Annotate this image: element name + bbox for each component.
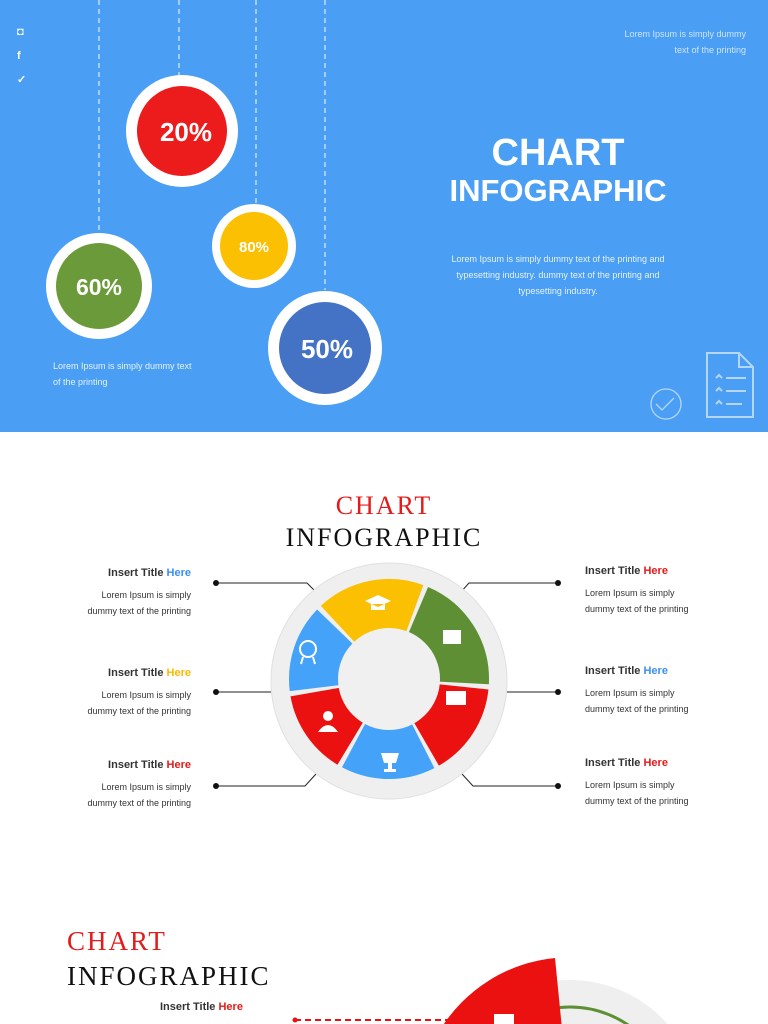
icons: social bbox=[17, 26, 26, 86]
icons: social: f bbox=[17, 50, 21, 62]
label: left 3: Lorem Ipsum is simply bbox=[101, 782, 191, 792]
label: right 3 bbox=[585, 757, 689, 806]
label: left 2: dummy text of the printing bbox=[87, 706, 191, 716]
label: left 1: dummy text of the printing bbox=[87, 606, 191, 616]
label: left 3: dummy text of the printing bbox=[87, 798, 191, 808]
label: left 3 bbox=[87, 759, 191, 808]
heading: chart infographic: INFOGRAPHIC bbox=[450, 173, 666, 208]
label: right 2: dummy text of the printing bbox=[585, 704, 689, 714]
text: bottom left note bbox=[53, 361, 192, 387]
donut chart bbox=[213, 562, 561, 800]
text: top right note bbox=[624, 29, 746, 55]
text: top right note: text of the printing bbox=[674, 45, 746, 55]
label: right 3: Insert Title Here bbox=[585, 757, 668, 769]
text: bottom left note: Lorem Ipsum is simply dummy text bbox=[53, 361, 192, 371]
label: left 1 bbox=[87, 567, 191, 616]
icons: social: ✓ bbox=[17, 74, 26, 86]
label: right 1: dummy text of the printing bbox=[585, 604, 689, 614]
label: right 2: Lorem Ipsum is simply bbox=[585, 688, 675, 698]
heading: section 3: CHART bbox=[67, 926, 167, 956]
icons: social: ◘ bbox=[17, 26, 24, 38]
heading: section 2: CHART bbox=[336, 491, 432, 520]
icon: document checklist bbox=[707, 353, 753, 417]
label: right 3: dummy text of the printing bbox=[585, 796, 689, 806]
hanging circles chart bbox=[46, 0, 754, 420]
heading: section 3 bbox=[67, 926, 271, 991]
label: right 1: Insert Title Here bbox=[585, 565, 668, 577]
label: right 1: Lorem Ipsum is simply bbox=[585, 588, 675, 598]
heading: chart infographic: CHART bbox=[492, 132, 624, 174]
heading: section 3: INFOGRAPHIC bbox=[67, 961, 271, 991]
label: right 2: Insert Title Here bbox=[585, 665, 668, 677]
heading: section 2: INFOGRAPHIC bbox=[286, 523, 482, 552]
hanging circles chart: 20% bbox=[160, 117, 212, 147]
label: right 2 bbox=[585, 665, 689, 714]
panel: top blue header bbox=[0, 0, 768, 432]
label: section 3 title: Insert Title Here bbox=[160, 1001, 243, 1013]
label: left 1: Insert Title Here bbox=[108, 567, 191, 579]
label: left 1: Lorem Ipsum is simply bbox=[101, 590, 191, 600]
section 3 chart bbox=[292, 958, 667, 1024]
icon: checkmark circle bbox=[651, 389, 681, 419]
text: bottom left note: of the printing bbox=[53, 377, 108, 387]
label: left 2: Lorem Ipsum is simply bbox=[101, 690, 191, 700]
text: top right note: Lorem Ipsum is simply dummy bbox=[624, 29, 746, 39]
heading: chart infographic bbox=[450, 132, 666, 208]
label: left 3: Insert Title Here bbox=[108, 759, 191, 771]
hanging circles chart: 50% bbox=[301, 334, 353, 364]
hanging circles chart: 60% bbox=[76, 274, 122, 300]
label: left 2: Insert Title Here bbox=[108, 667, 191, 679]
text: description: Lorem Ipsum is simply dummy text of the printing and typesetting industry. dummy text of the printing and typesetting industry. bbox=[451, 254, 665, 296]
label: right 1 bbox=[585, 565, 689, 614]
hanging circles chart: 80% bbox=[239, 239, 269, 256]
heading: section 2 bbox=[286, 491, 482, 552]
label: right 3: Lorem Ipsum is simply bbox=[585, 780, 675, 790]
label: left 2 bbox=[87, 667, 191, 716]
